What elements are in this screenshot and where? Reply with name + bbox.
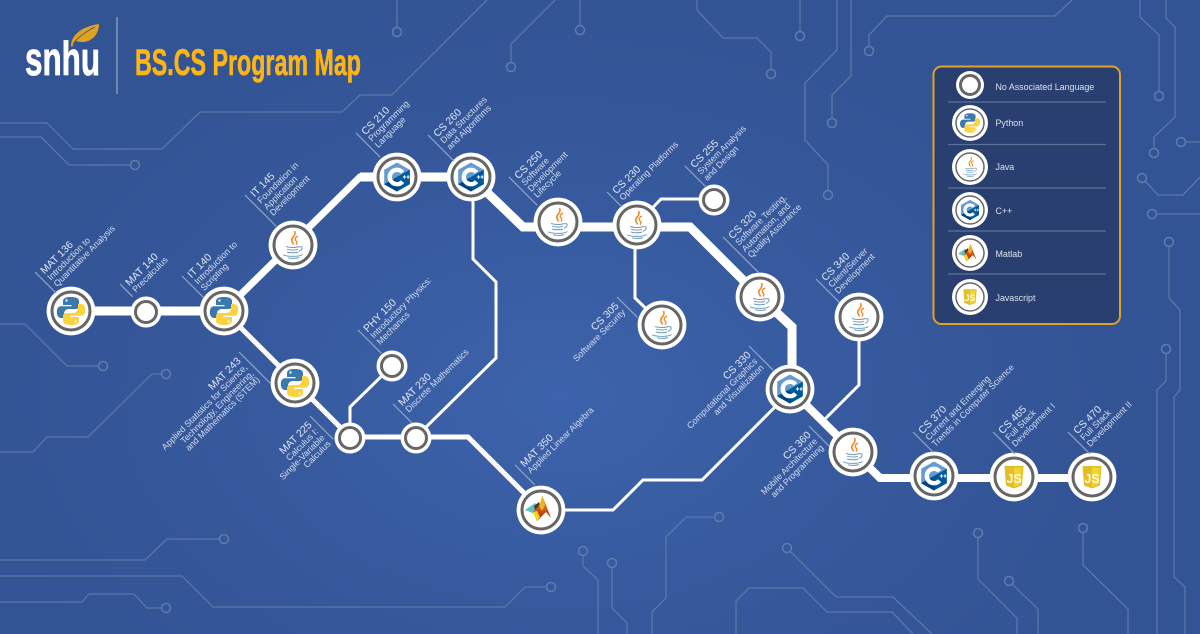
label: IT 145: Application [262, 174, 299, 212]
course node: CS 470 [1068, 453, 1116, 501]
label: CS 320 [723, 183, 813, 272]
label: CS 230: Operating Platforms [617, 139, 681, 202]
course node: CS 305 [638, 301, 686, 349]
label: CS 470: Full Stack [1078, 407, 1113, 442]
label: CS 320: Automation, and [740, 201, 792, 254]
course node: CS 360 [829, 428, 877, 476]
label: CS 230: CS 230 [611, 164, 643, 197]
label: CS 370: CS 370 [917, 404, 949, 437]
course node: MAT 243 [271, 359, 319, 407]
course node: CS 230 [613, 201, 661, 249]
label: CS 360 [752, 426, 829, 503]
label: PHY 150 [358, 268, 443, 353]
label: MAT 225: Calculus I: [284, 426, 320, 463]
label: MAT 225: MAT 225 [278, 420, 315, 457]
title: BS.CS Program Map [135, 42, 361, 83]
label: CS 320: Quality Assurance [746, 202, 803, 260]
label: CS 210: Language [373, 115, 408, 150]
label: CS 340: Development [833, 251, 877, 296]
label: CS 465: CS 465 [997, 404, 1029, 437]
label: MAT 243 [153, 352, 270, 469]
label: IT 140 [182, 233, 247, 297]
course node: CS 320 [736, 273, 784, 321]
label: CS 330: and Visualization [711, 363, 766, 417]
legend item: Java: Java [996, 162, 1014, 172]
label: CS 255: CS 255 [689, 138, 721, 171]
connector paths between courses [71, 177, 1091, 510]
course node: CS 465 [990, 453, 1038, 501]
label: CS 470 [1068, 386, 1136, 454]
label: MAT 225: Calculus [301, 438, 333, 470]
label: MAT 140 [120, 248, 170, 298]
course node: MAT 140 [130, 296, 162, 328]
legend item: No Associated Language [956, 71, 1094, 99]
label: CS 470: Development II [1085, 399, 1134, 449]
label: MAT 243: and Mathematics (STEM) [183, 375, 262, 453]
logo: snhu [25, 24, 100, 85]
legend item: No Associated Language: No Associated Language [996, 82, 1094, 92]
label: IT 145 [245, 153, 318, 226]
label: IT 140: Introduction to [192, 239, 239, 286]
label: CS 340 [816, 238, 880, 302]
legend panel [934, 66, 1120, 324]
label: PHY 150: Introductory Physics: [368, 275, 434, 340]
label: CS 255: and Design [702, 144, 740, 183]
label: CS 255: System Analysis [695, 123, 748, 176]
course node: MAT 350 [517, 486, 565, 534]
label: MAT 230 [393, 340, 476, 423]
course node: MAT 230 [400, 422, 432, 454]
course node: CS 255 [698, 184, 730, 216]
label: IT 145: IT 145 [249, 171, 278, 200]
label: CS 250: Software [519, 155, 551, 187]
label: CS 255 [685, 116, 755, 187]
label: CS 340: CS 340 [820, 251, 852, 284]
label: IT 145: Foundation in [255, 160, 300, 205]
label: CS 250: Development [526, 149, 570, 194]
course node: IT 140 [200, 287, 248, 335]
legend item: C++: C++ [996, 206, 1012, 216]
label: CS 250: CS 250 [513, 149, 545, 182]
course node: CS 370 [910, 452, 958, 500]
label: CS 360: CS 360 [781, 430, 814, 462]
label: CS 210: CS 210 [360, 105, 392, 138]
label: IT 140: IT 140 [186, 252, 215, 281]
course node: CS 250 [534, 198, 582, 246]
label: MAT 243: Applied Statistics for Science, [160, 362, 249, 452]
label: CS 250: Lifecycle [532, 168, 563, 200]
legend item: Matlab [952, 235, 1022, 271]
label: CS 250 [509, 136, 578, 205]
label: MAT 136: Quantitative Analysis [52, 223, 117, 289]
label: CS 470: CS 470 [1072, 404, 1104, 437]
label: MAT 136 [35, 210, 118, 293]
label: MAT 136: MAT 136 [39, 240, 76, 277]
label: CS 330: Computational Graphics [685, 356, 760, 431]
label: MAT 136: Introduction to [45, 235, 92, 282]
label: MAT 225 [264, 416, 336, 488]
course node: IT 145 [269, 221, 317, 269]
legend item: Javascript: Javascript [996, 293, 1036, 303]
label: CS 305: Software Security [571, 307, 628, 364]
label: MAT 243: MAT 243 [207, 356, 244, 393]
label: MAT 350: MAT 350 [519, 433, 556, 470]
label: PHY 150: Mechanics [375, 309, 412, 347]
label: CS 330 [678, 346, 773, 441]
label: MAT 230: MAT 230 [397, 372, 434, 409]
label: CS 340: Client/Server [826, 246, 870, 289]
label: CS 330: CS 330 [721, 350, 754, 382]
label: CS 465 [993, 388, 1059, 454]
legend item: Javascript [952, 279, 1036, 315]
label: CS 260: CS 260 [432, 107, 464, 140]
label: CS 370: Trends in Computer Science [930, 362, 1016, 449]
legend item: C++ [952, 192, 1012, 228]
label: CS 320: Software Testing, [733, 192, 788, 247]
label: MAT 230: Discrete Mathematics [403, 346, 471, 414]
label: CS 210 [356, 92, 421, 157]
course node: CS 260 [447, 153, 495, 201]
label: CS 370 [913, 349, 1016, 453]
label: CS 305: CS 305 [589, 301, 622, 333]
course node: CS 330 [766, 365, 814, 413]
label: CS 305 [564, 297, 638, 370]
course node: PHY 150 [376, 350, 408, 382]
label: CS 260: Data Structures [438, 94, 489, 145]
label: IT 140: Scripting [199, 261, 230, 293]
label: MAT 243: Technology, Engineering, [179, 369, 256, 446]
legend item: Java [952, 149, 1014, 185]
label: CS 360: Mobile Architecture [759, 436, 819, 497]
label: IT 145: Development [268, 173, 312, 218]
label: CS 465: Development I [1010, 401, 1057, 449]
label: MAT 225: Single-Variable [277, 433, 327, 482]
label: CS 260: and Algorithms [445, 103, 494, 152]
label: CS 360: and Programming [769, 443, 826, 500]
label: MAT 350 [515, 398, 602, 485]
label: MAT 140: MAT 140 [124, 252, 161, 289]
label: MAT 350: Applied Linear Algebra [525, 405, 596, 475]
course node: MAT 225 [334, 422, 366, 454]
label: CS 260 [428, 87, 502, 161]
logo: snhu: snhu [25, 32, 100, 85]
course node: CS 340 [835, 293, 883, 341]
course node: MAT 136 [47, 287, 95, 335]
legend item: Python [952, 105, 1023, 141]
legend item: Matlab: Matlab [996, 249, 1022, 259]
legend item: Python: Python [996, 118, 1023, 128]
label: CS 370: Current and Emerging [923, 373, 992, 442]
label: CS 465: Full Stack [1003, 407, 1038, 442]
label: CS 320: CS 320 [727, 209, 759, 242]
course node: CS 210 [373, 153, 421, 201]
label: MAT 140: Precalculus [130, 254, 170, 294]
label: PHY 150: PHY 150 [362, 297, 399, 335]
label: CS 210: Programming [366, 98, 411, 143]
